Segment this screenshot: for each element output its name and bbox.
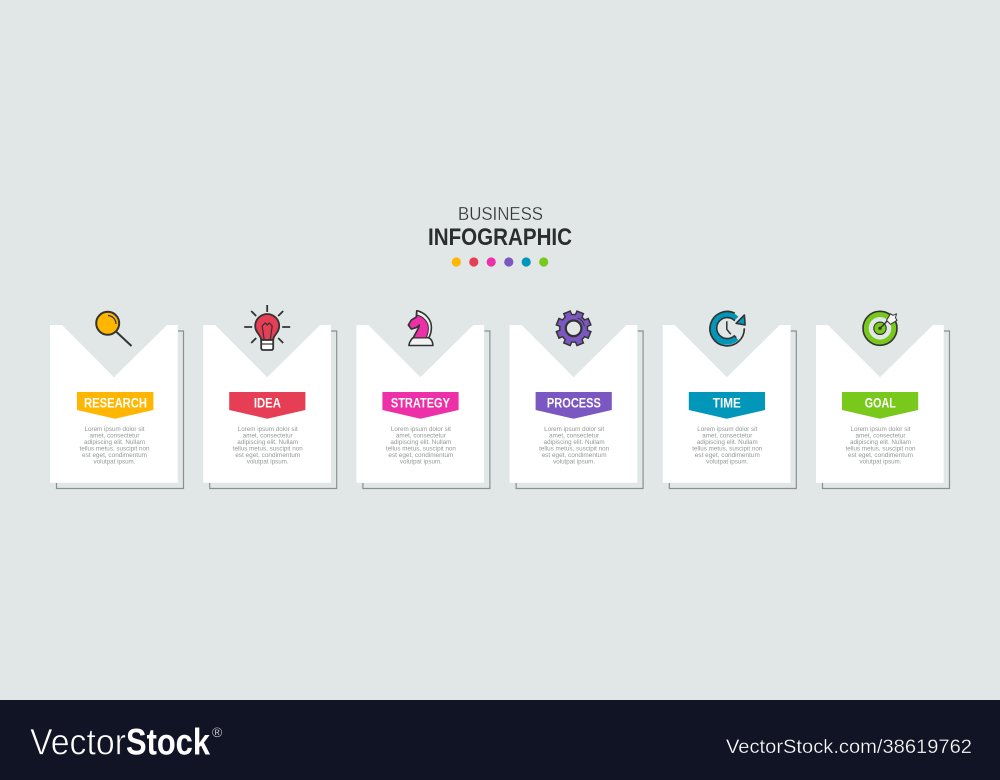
banner xyxy=(382,392,459,419)
banner label: RESEARCH xyxy=(84,396,147,410)
banner label: TIME xyxy=(713,396,741,410)
body text: amet, consectetur xyxy=(549,432,600,440)
body text: adipiscing elit. Nullam xyxy=(237,439,299,446)
banner xyxy=(229,392,305,419)
icon: target xyxy=(863,311,897,345)
body text: Lorem ipsum dolor sit xyxy=(391,426,451,433)
body text xyxy=(386,426,456,466)
body text: adipiscing elit. Nullam xyxy=(850,439,911,446)
body text: volutpat ipsum. xyxy=(553,458,595,466)
body text: tellus metus, suscipit non xyxy=(80,446,150,452)
banner xyxy=(842,392,918,419)
body text: Lorem ipsum dolor sit xyxy=(84,426,145,433)
colour dots xyxy=(452,257,548,267)
footer url: VectorStock.com/38619762 xyxy=(726,736,972,758)
body text: Lorem ipsum dolor sit xyxy=(697,426,757,433)
body text: adipiscing elit. Nullam xyxy=(84,439,145,446)
icon: magnifier xyxy=(96,312,132,346)
footer bar xyxy=(0,700,1000,780)
banner label: IDEA xyxy=(254,396,281,410)
body text xyxy=(80,426,150,466)
panel: idea xyxy=(203,305,337,488)
icon: chess knight xyxy=(408,311,433,346)
body text xyxy=(692,426,763,466)
card outline xyxy=(210,331,337,488)
body text xyxy=(233,426,303,466)
card outline xyxy=(516,331,643,488)
panel: research xyxy=(50,312,184,488)
card body xyxy=(50,325,178,483)
icon: clock with arrow xyxy=(710,311,745,346)
body text: Lorem ipsum dolor sit xyxy=(544,426,604,433)
body text: tellus metus, suscipit non xyxy=(386,446,456,452)
body text: amet, consectetur xyxy=(243,432,293,440)
panel: process xyxy=(510,305,643,488)
banner label: STRATEGY xyxy=(391,396,450,410)
banner label: GOAL xyxy=(865,396,896,410)
footer logo: Vector xyxy=(30,722,126,762)
card body xyxy=(816,325,944,483)
banner label: PROCESS xyxy=(547,396,601,410)
body text: tellus metus, suscipit non xyxy=(846,446,916,452)
body text: est eget, condimentum xyxy=(848,452,913,459)
banner xyxy=(77,392,153,419)
card outline xyxy=(822,331,950,488)
body text: est eget, condimentum xyxy=(82,452,147,459)
body text: adipiscing elit. Nullam xyxy=(390,439,452,446)
title xyxy=(428,203,572,251)
banner xyxy=(689,392,765,419)
title: BUSINESS xyxy=(458,203,543,224)
body text: Lorem ipsum dolor sit xyxy=(850,426,911,433)
body text: volutpat ipsum. xyxy=(94,458,136,466)
body text xyxy=(539,426,609,466)
body text: est eget, condimentum xyxy=(235,452,301,459)
body text: amet, consectetur xyxy=(856,432,906,440)
banner xyxy=(536,392,612,419)
body text: volutpat ipsum. xyxy=(247,458,289,466)
body text: amet, consectetur xyxy=(396,432,447,440)
body text: tellus metus, suscipit non xyxy=(692,446,763,452)
card body xyxy=(356,325,484,483)
panel: time xyxy=(663,311,796,488)
footer logo: ® xyxy=(212,724,223,740)
card body xyxy=(510,325,637,483)
footer logo: Stock xyxy=(126,722,210,762)
body text: est eget, condimentum xyxy=(388,452,454,459)
title: INFOGRAPHIC xyxy=(428,224,572,251)
body text: volutpat ipsum. xyxy=(860,458,902,466)
body text: amet, consectetur xyxy=(90,432,140,440)
card outline xyxy=(56,331,184,488)
card outline xyxy=(363,331,490,488)
body text: volutpat ipsum. xyxy=(400,458,442,466)
card outline xyxy=(669,331,796,488)
icon: gear xyxy=(550,305,597,352)
body text: amet, consectetur xyxy=(702,432,753,440)
body text xyxy=(846,426,916,466)
body text: tellus metus, suscipit non xyxy=(233,446,303,452)
body text: adipiscing elit. Nullam xyxy=(544,439,605,446)
card body xyxy=(203,325,331,483)
body text: Lorem ipsum dolor sit xyxy=(238,426,298,433)
body text: est eget, condimentum xyxy=(542,452,607,459)
body text: adipiscing elit. Nullam xyxy=(697,439,758,446)
panel: strategy xyxy=(356,311,490,488)
icon: light bulb xyxy=(244,305,290,350)
panel: goal xyxy=(816,311,950,488)
footer logo xyxy=(30,722,223,762)
body text: tellus metus, suscipit non xyxy=(539,446,609,452)
card body xyxy=(663,325,790,483)
body text: volutpat ipsum. xyxy=(706,458,748,466)
body text: est eget, condimentum xyxy=(695,452,760,459)
